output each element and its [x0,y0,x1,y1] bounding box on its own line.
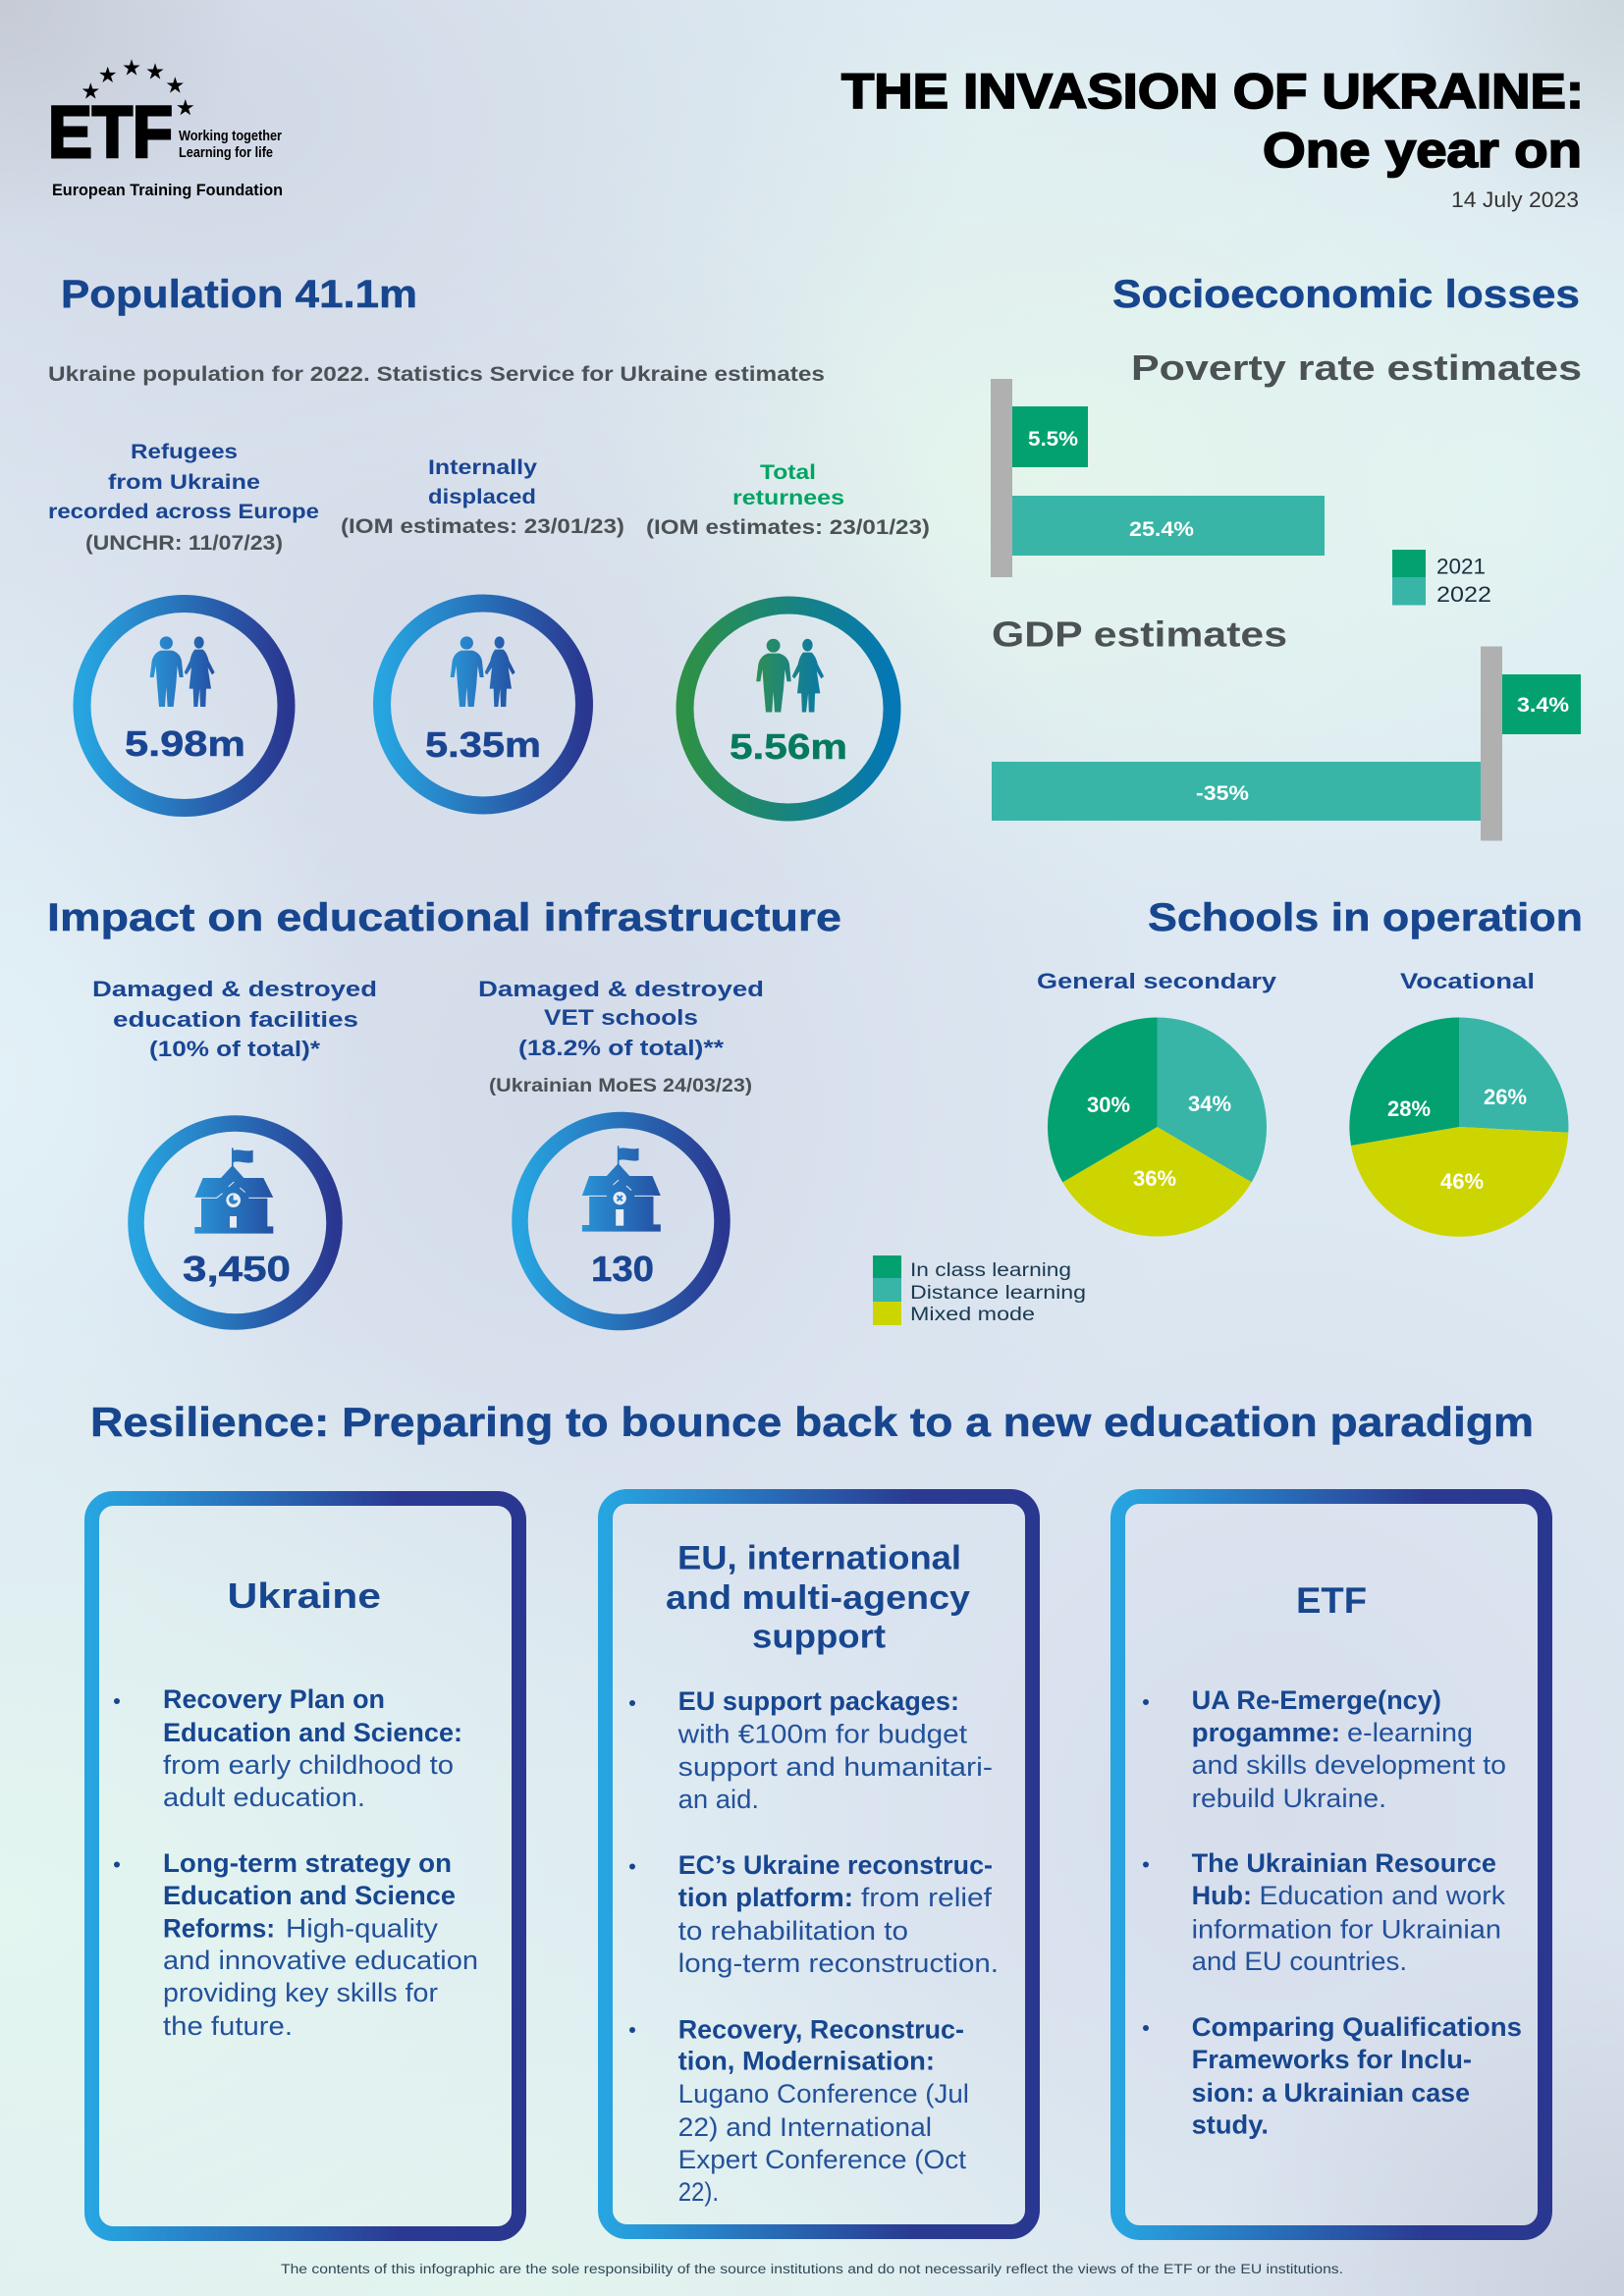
icon: VET school [582,1146,661,1232]
bullet: UA Re-Emerge(ncy): UA Re-Emerge(ncy) [1192,1685,1441,1715]
title: THE INVASION OF UKRAINE: [841,64,1584,119]
caption: total returnees [646,461,930,539]
circle: refugees 5.98m: 5.98m [125,723,245,764]
bullet: comparing qualifications [1143,2012,1522,2140]
caption: internally displaced: displaced [428,486,536,508]
caption: education facilities: (10% of total)* [149,1037,320,1061]
caption: VET schools: (Ukrainian MoES 24/03/23) [489,1076,752,1096]
icon: two people [451,636,515,707]
caption: internally displaced: Internally [428,456,537,479]
caption: refugees [48,441,319,555]
caption: total returnees: returnees [732,487,844,509]
caption: refugees: from Ukraine [108,471,260,494]
logo: ETF: ETF [48,91,173,173]
logo: ETF: Working together [179,128,282,144]
pie chart: general secondary: General secondary [1037,969,1277,993]
legend: learning modes [873,1255,1086,1325]
bullet: EU support packages: with €100m for budget [677,1720,968,1749]
bar chart: poverty rate: 5.5% [1028,428,1078,451]
panel: population [48,273,930,813]
bullet: recovery conferences: 22). [678,2177,719,2207]
bar chart: GDP: 3.4% [1517,694,1569,717]
bullet: recovery plan: adult education. [163,1783,365,1812]
panel: educational infrastructure [47,896,841,1322]
circle: VET schools 130 [520,1120,723,1322]
circle: total returnees 5.56m [685,605,892,813]
bullet: recovery conferences: 22) and International [678,2112,932,2142]
bar chart: GDP [992,646,1581,840]
card heading: support [752,1618,886,1655]
legend: learning modes: In class learning [910,1260,1071,1281]
logo: ETF: European Training Foundation [52,182,283,199]
card heading [666,1539,970,1655]
caption: total returnees: (IOM estimates: 23/01/23) [646,516,930,539]
circle: internally displaced 5.35m [382,603,584,805]
bullet: reconstruction platform [629,1850,999,1978]
card heading: EU, international [677,1539,961,1576]
pie chart: vocational: 28% [1387,1096,1431,1121]
heading: schools in operation: Schools in operation [1148,896,1583,939]
card heading: and multi-agency [666,1579,970,1617]
icon: school [194,1148,273,1234]
heading: GDP estimates: GDP estimates [992,614,1287,654]
card heading: ETF [1296,1580,1367,1621]
heading: poverty rate estimates: Poverty rate estimates [1131,347,1582,388]
pie chart: general secondary: 30% [1087,1093,1130,1117]
bullet: recovery plan: Recovery Plan on [163,1684,385,1714]
bullet: reconstruction platform: to rehabilitation to [678,1916,908,1946]
bullet: UA Re-Emerge(ncy): progamme: [1192,1718,1340,1747]
bullet: EU support packages: support and humanitari- [678,1752,993,1782]
bullet: long-term strategy: Education and Science [163,1881,456,1910]
bullet: long-term strategy: High-quality [286,1914,439,1944]
caption: total returnees: Total [760,461,816,484]
logo: ETF: Learning for life [179,144,273,161]
caption: VET schools: Damaged & destroyed [478,977,764,1001]
caption: VET schools [478,977,764,1096]
bullet: Ukrainian Resource Hub: Education and work [1259,1881,1506,1910]
circle: refugees 5.98m [82,604,287,808]
pie chart: general secondary: 34% [1188,1092,1231,1116]
bullet: Ukrainian Resource Hub: information for Ukrainian [1192,1914,1501,1944]
panel: ETF card [1117,1496,1545,2232]
bullet: reconstruction platform: EC’s Ukraine reconstruc- [678,1850,993,1880]
title: 14 July 2023 [1451,187,1579,212]
bullet: recovery plan: from early childhood to [163,1750,454,1780]
bullet: comparing qualifications: sion: a Ukrainian case [1192,2078,1470,2108]
bullet: recovery conferences: tion, Modernisation: [678,2047,935,2076]
bullet: Ukrainian Resource Hub: The Ukrainian Resource [1192,1848,1496,1878]
circle: education facilities 3,450 [135,1123,334,1321]
bullet: UA Re-Emerge(ncy): e-learning [1347,1718,1473,1747]
circle: education facilities 3,450: 3,450 [183,1249,291,1289]
caption: education facilities: education facilities [113,1007,358,1032]
pie chart: vocational: 26% [1484,1085,1527,1109]
bullet: recovery plan: Education and Science: [163,1718,462,1747]
heading: resilience: Resilience: Preparing to bounce back to a new education paradigm [90,1399,1534,1445]
title: One year on [1263,123,1582,178]
icon: two people [150,636,215,707]
pie chart: vocational: Vocational [1400,969,1535,993]
panel: Ukraine card [92,1498,518,2234]
bullet: EU support packages [629,1686,993,1814]
legend: years: 2022 [1436,582,1491,607]
heading: population: Population 41.1m [61,273,417,316]
bullet: comparing qualifications: Frameworks for Inclu- [1192,2045,1472,2074]
bullet: recovery conferences: Recovery, Reconstruc- [678,2014,964,2044]
pie chart: vocational: 46% [1440,1169,1484,1194]
bullet: Ukrainian Resource Hub [1143,1848,1506,1976]
bullet: recovery plan [114,1684,462,1812]
pie chart: vocational [1349,969,1568,1237]
bar chart: poverty rate: 25.4% [1129,518,1194,541]
pie chart: general secondary: 36% [1133,1166,1176,1191]
caption: internally displaced [341,456,624,538]
heading: impact on educational infrastructure: Impact on educational infrastructure [47,896,841,939]
circle: total returnees 5.56m: 5.56m [730,726,847,767]
caption: refugees: Refugees [131,441,238,463]
footer disclaimer: The contents of this infographic are the sole responsibility of the source institutions and do not necessarily reflect the views of the ETF or the EU institutions. [281,2262,1343,2276]
bullet: long-term strategy [114,1848,478,2041]
legend: years [1392,550,1491,607]
caption: refugees: (UNCHR: 11/07/23) [85,532,283,555]
caption: internally displaced: (IOM estimates: 23/01/23) [341,515,624,538]
bullet: UA Re-Emerge(ncy) [1143,1685,1506,1813]
pie chart: general secondary [1037,969,1277,1237]
panel: schools in operation [873,896,1583,1325]
bullet: EU support packages: an aid. [678,1785,759,1814]
legend: learning modes: Distance learning [910,1283,1086,1304]
legend: learning modes: Mixed mode [910,1305,1035,1325]
icon: two people green [756,639,824,713]
bar chart: poverty rate [991,379,1325,577]
bullet: reconstruction platform: tion platform: [678,1883,853,1912]
bullet: UA Re-Emerge(ncy): and skills development to [1192,1750,1506,1780]
caption: refugees: recorded across Europe [48,501,319,523]
bullet: long-term strategy: Reforms: [163,1914,275,1944]
population source note: Ukraine population for 2022. Statistics Service for Ukraine estimates [48,362,825,386]
bullet: long-term strategy: Long-term strategy on [163,1848,452,1878]
circle: internally displaced 5.35m: 5.35m [425,724,541,765]
bullet: UA Re-Emerge(ncy): rebuild Ukraine. [1192,1784,1386,1813]
bullet: Ukrainian Resource Hub: and EU countries. [1192,1947,1407,1976]
bullet: long-term strategy: providing key skills for [163,1978,438,2007]
bullet: EU support packages: EU support packages: [678,1686,959,1716]
bullet: comparing qualifications: study. [1192,2110,1269,2140]
caption: education facilities: Damaged & destroyed [92,977,377,1001]
heading: socioeconomic losses: Socioeconomic losses [1112,273,1580,316]
title [841,64,1584,212]
bullet: recovery conferences: Expert Conference (Oct [678,2145,967,2174]
circle: VET schools 130: 130 [591,1249,654,1289]
caption: VET schools: VET schools [544,1005,698,1030]
bullet: reconstruction platform: from relief [861,1883,993,1912]
bullet: long-term strategy: and innovative education [163,1946,478,1975]
bullet: comparing qualifications: Comparing Qualifications [1192,2012,1522,2042]
panel: socioeconomic losses [991,273,1582,840]
legend: years: 2021 [1436,554,1486,579]
bar chart: GDP: -35% [1196,782,1249,805]
bullet: recovery conferences: Lugano Conference (Jul [678,2079,969,2109]
caption: education facilities [92,977,377,1061]
bullet: reconstruction platform: long-term reconstruction. [678,1949,999,1978]
card heading: Ukraine [228,1575,381,1616]
logo: ETF [48,59,283,199]
bullet: long-term strategy: the future. [163,2011,293,2041]
bullet: Ukrainian Resource Hub: Hub: [1192,1881,1252,1910]
panel: EU card [605,1496,1033,2232]
bullet: recovery conferences [629,2014,969,2207]
caption: VET schools: (18.2% of total)** [518,1036,724,1060]
